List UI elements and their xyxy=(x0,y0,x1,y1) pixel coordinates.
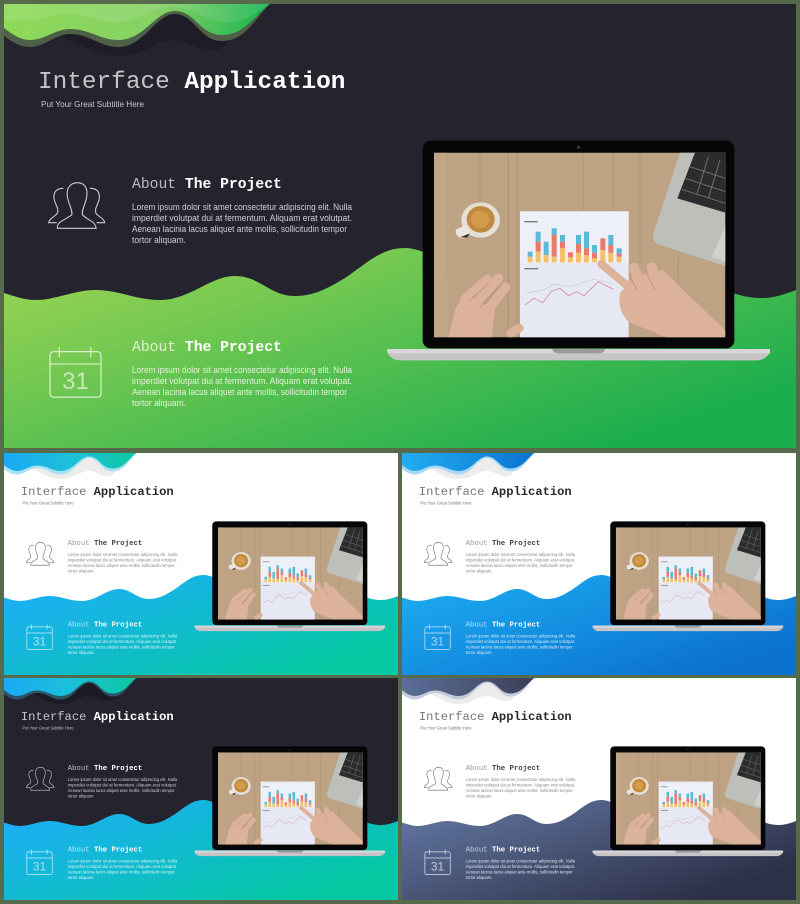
text block: first description: Lorem ipsum dolor sit amet consectetur adipiscing elit. Nulla xyxy=(68,552,178,557)
text block: second description: Lorem ipsum dolor sit amet consectetur adipiscing elit. Nulla xyxy=(68,633,178,639)
heading: about the project 2: About The Project xyxy=(466,846,540,855)
text block: second description: tortor aliquam. xyxy=(466,875,493,880)
icon: calendar xyxy=(425,624,450,650)
heading: about the project: About The Project xyxy=(466,765,540,773)
text block: second description xyxy=(68,633,178,655)
text block: second description xyxy=(466,633,576,655)
text block: second description: Lorem ipsum dolor sit amet consectetur adipiscing elit. Nulla xyxy=(466,633,576,639)
laptop with photo xyxy=(387,141,770,360)
top wave xyxy=(4,678,136,696)
heading: about the project 2: About The Project xyxy=(132,340,282,356)
text block: second description: Lorem ipsum dolor sit amet consectetur adipiscing elit. Nulla xyxy=(132,365,352,375)
text block: first description xyxy=(132,202,352,245)
text block: second description: imperdiet volutpat dui at fermentum. Aliquam erat volutpat. xyxy=(132,376,352,386)
text block: second description: Lorem ipsum dolor sit amet consectetur adipiscing elit. Nulla xyxy=(466,858,576,864)
text block: first description: Aenean lacinia lacus aliquet ante mollis, sollicitudin tempor xyxy=(68,788,175,793)
heading: about the project: About The Project xyxy=(68,540,142,548)
text block: second description xyxy=(132,365,352,408)
icon: calendar: 31 xyxy=(62,368,89,395)
icon: people xyxy=(26,542,54,565)
text block: first description: Aenean lacinia lacus aliquet ante mollis, sollicitudin tempor xyxy=(466,788,573,793)
top wave xyxy=(4,453,136,471)
text block: second description: imperdiet volutpat dui at fermentum. Aliquam erat volutpat. xyxy=(68,639,177,644)
text block: second description: Aenean lacinia lacus aliquet ante mollis, sollicitudin tempor xyxy=(68,869,175,875)
icon: calendar xyxy=(425,850,450,875)
text block: first description: imperdiet volutpat dui at fermentum. Aliquam erat volutpat. xyxy=(68,782,177,788)
text block: first description: Lorem ipsum dolor sit amet consectetur adipiscing elit. Nulla xyxy=(68,777,178,782)
text block: second description: imperdiet volutpat dui at fermentum. Aliquam erat volutpat. xyxy=(68,864,177,869)
subtitle: Put Your Great Subtitle Here xyxy=(420,725,472,731)
top wave xyxy=(4,4,270,40)
icon: people xyxy=(424,767,452,790)
text block: second description xyxy=(68,858,178,880)
laptop with photo xyxy=(593,521,783,631)
text block: first description: tortor aliquam. xyxy=(466,568,493,574)
text block: second description: tortor aliquam. xyxy=(466,650,493,655)
text block: first description: tortor aliquam. xyxy=(132,235,186,245)
text block: first description: tortor aliquam. xyxy=(68,793,95,799)
title: Interface Application xyxy=(419,710,572,724)
bottom wave xyxy=(402,800,796,900)
text block: first description: imperdiet volutpat dui at fermentum. Aliquam erat volutpat. xyxy=(132,213,352,223)
icon: calendar: 31 xyxy=(431,634,445,649)
heading: about the project 2: About The Project xyxy=(68,846,142,855)
icon: calendar xyxy=(50,347,101,397)
text block: second description: tortor aliquam. xyxy=(68,650,95,655)
text block: second description: Lorem ipsum dolor sit amet consectetur adipiscing elit. Nulla xyxy=(68,858,178,864)
laptop with photo xyxy=(195,521,385,631)
text block: first description xyxy=(466,552,576,574)
bottom wave xyxy=(4,800,398,900)
slide: white teal xyxy=(4,453,398,675)
bottom wave xyxy=(4,248,796,448)
text block: first description: Lorem ipsum dolor sit amet consectetur adipiscing elit. Nulla xyxy=(466,552,576,557)
text block: first description: Aenean lacinia lacus aliquet ante mollis, sollicitudin tempor xyxy=(132,224,347,234)
icon: calendar: 31 xyxy=(33,634,47,649)
text block: second description: Aenean lacinia lacus aliquet ante mollis, sollicitudin tempor xyxy=(132,387,347,397)
text block: first description xyxy=(466,777,576,799)
text block: second description: imperdiet volutpat dui at fermentum. Aliquam erat volutpat. xyxy=(466,864,575,869)
bottom wave xyxy=(402,575,796,675)
text block: second description: tortor aliquam. xyxy=(132,398,186,408)
subtitle: Put Your Great Subtitle Here xyxy=(41,99,144,109)
text block: first description: Aenean lacinia lacus aliquet ante mollis, sollicitudin tempor xyxy=(466,563,573,568)
text block: second description: imperdiet volutpat dui at fermentum. Aliquam erat volutpat. xyxy=(466,639,575,644)
slide: dark green main xyxy=(4,4,796,448)
heading: about the project: About The Project xyxy=(68,765,142,773)
text block: first description xyxy=(68,552,178,574)
text block: first description: Aenean lacinia lacus aliquet ante mollis, sollicitudin tempor xyxy=(68,563,175,568)
heading: about the project: About The Project xyxy=(466,540,540,548)
text block: first description: Lorem ipsum dolor sit amet consectetur adipiscing elit. Nulla xyxy=(466,777,576,782)
title: Interface Application xyxy=(38,69,345,96)
subtitle: Put Your Great Subtitle Here xyxy=(22,725,74,731)
subtitle: Put Your Great Subtitle Here xyxy=(22,500,74,506)
icon: calendar xyxy=(27,624,52,650)
heading: about the project 2: About The Project xyxy=(68,621,142,630)
icon: calendar: 31 xyxy=(431,859,445,874)
bottom wave xyxy=(4,575,398,675)
text block: first description xyxy=(68,777,178,799)
title: Interface Application xyxy=(21,710,174,724)
text block: second description: tortor aliquam. xyxy=(68,875,95,880)
subtitle: Put Your Great Subtitle Here xyxy=(420,500,472,506)
title: Interface Application xyxy=(21,485,174,499)
text block: first description: imperdiet volutpat dui at fermentum. Aliquam erat volutpat. xyxy=(466,557,575,563)
text block: first description: imperdiet volutpat dui at fermentum. Aliquam erat volutpat. xyxy=(466,782,575,788)
text block: second description: Aenean lacinia lacus aliquet ante mollis, sollicitudin tempor xyxy=(466,869,573,875)
top wave xyxy=(402,453,534,471)
heading: about the project: About The Project xyxy=(132,177,282,193)
text block: first description: tortor aliquam. xyxy=(68,568,95,574)
laptop with photo xyxy=(593,746,783,856)
slide: white slate xyxy=(402,678,796,900)
text block: second description: Aenean lacinia lacus aliquet ante mollis, sollicitudin tempor xyxy=(68,644,175,650)
text block: first description: tortor aliquam. xyxy=(466,793,493,799)
heading: about the project 2: About The Project xyxy=(466,621,540,630)
laptop with photo xyxy=(195,746,385,856)
icon: people xyxy=(26,767,54,790)
icon: calendar: 31 xyxy=(33,859,47,874)
text block: first description: imperdiet volutpat dui at fermentum. Aliquam erat volutpat. xyxy=(68,557,177,563)
top wave xyxy=(402,678,534,696)
text block: second description: Aenean lacinia lacus aliquet ante mollis, sollicitudin tempor xyxy=(466,644,573,650)
icon: people xyxy=(49,183,105,228)
text block: first description: Lorem ipsum dolor sit amet consectetur adipiscing elit. Nulla xyxy=(132,202,352,212)
icon: calendar xyxy=(27,850,52,875)
slide: dark teal xyxy=(4,678,398,900)
slide: white blue xyxy=(402,453,796,675)
text block: second description xyxy=(466,858,576,880)
icon: people xyxy=(424,542,452,565)
title: Interface Application xyxy=(419,485,572,499)
